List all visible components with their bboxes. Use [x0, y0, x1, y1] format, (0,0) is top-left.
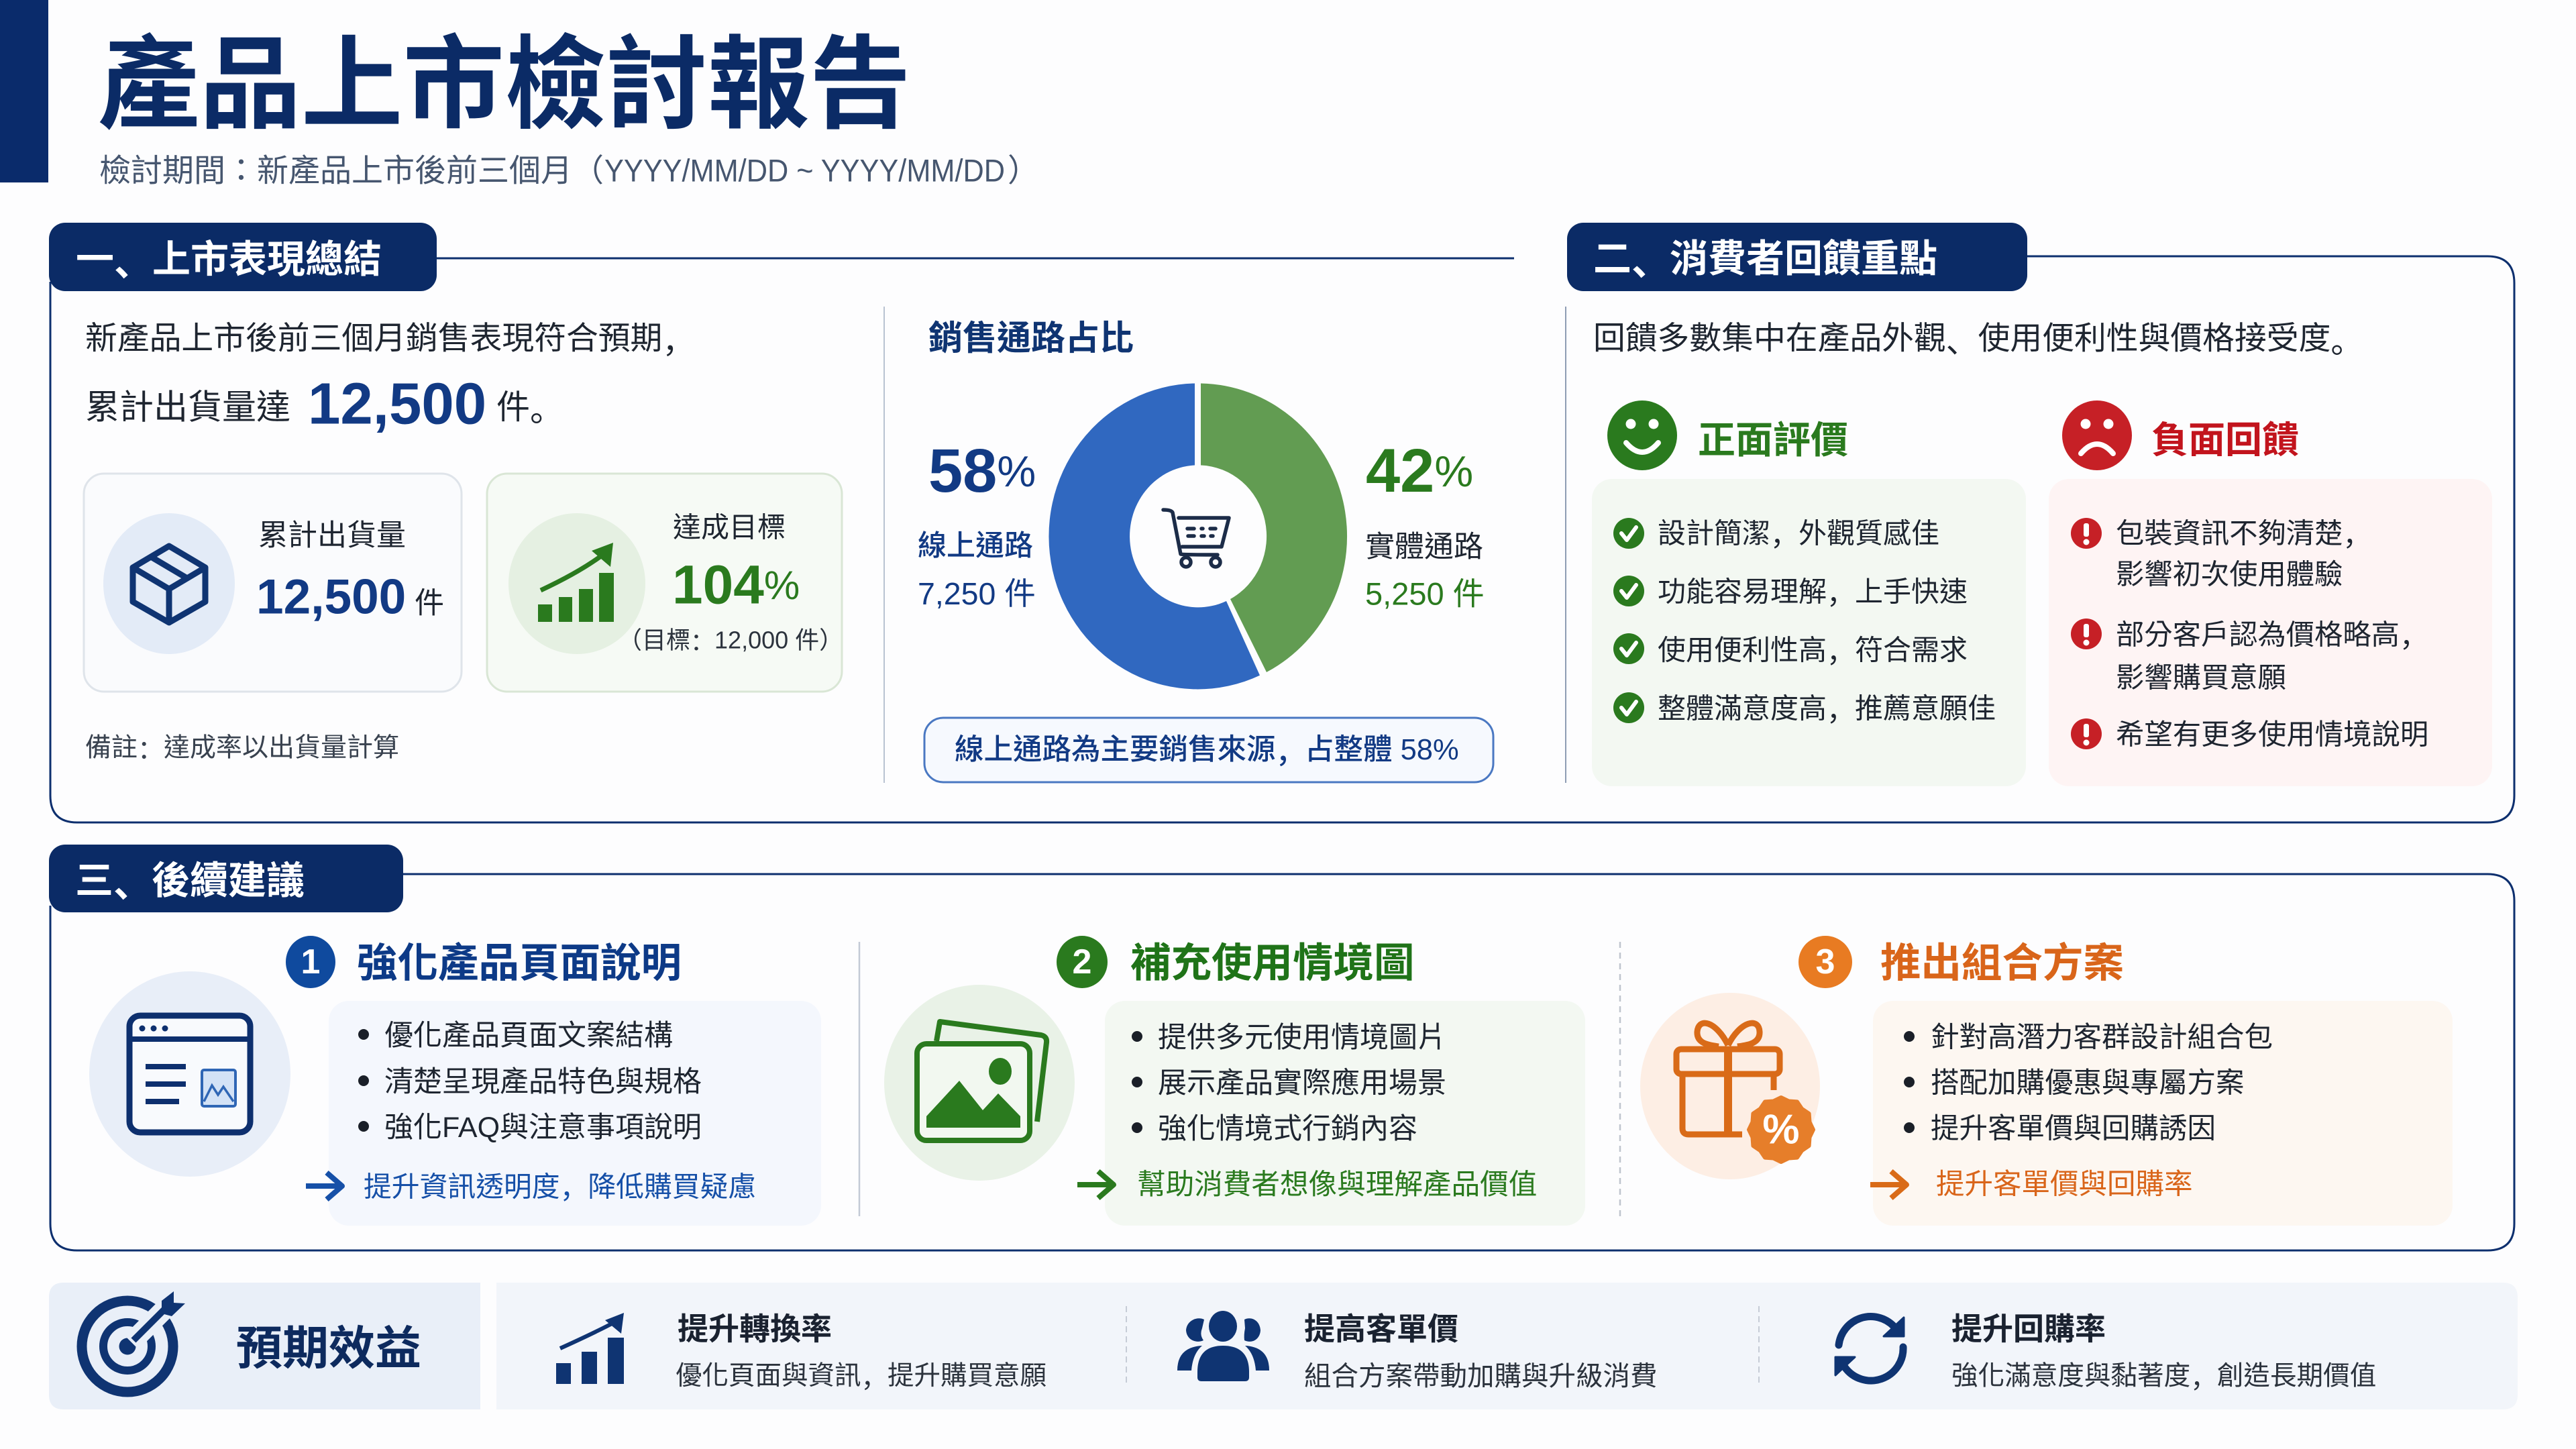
physical channel label [1365, 437, 1485, 612]
panel: consumer feedback highlights [1566, 223, 2514, 822]
stat card: target achievement [487, 474, 843, 692]
bullet list: 針對高潛力客群設計組合包 [1931, 1022, 2273, 1053]
outcome text: 提升資訊透明度，降低購買疑慮 [364, 1167, 756, 1207]
summary sentence [85, 315, 694, 436]
summary sentence: 件。 [496, 383, 564, 431]
benefit: conversion rate: 提升轉換率 [678, 1311, 832, 1346]
stat card: cumulative shipments [84, 474, 462, 692]
feedback summary: 回饋多數集中在產品外觀、使用便利性與價格接受度。 [1593, 315, 2363, 362]
column divider [1619, 942, 1621, 1216]
panel: expected benefits list [496, 1283, 2518, 1409]
icon: frowning face [2062, 400, 2132, 470]
summary sentence: 累計出貨量達 [85, 388, 290, 427]
panel outline [50, 258, 1570, 822]
recommendation 1: product page [89, 936, 821, 1226]
subtitle: review period: ） [1008, 153, 1039, 188]
stat label: 累計出貨量 [258, 519, 406, 551]
panel outline [50, 874, 2514, 1250]
positive item 4: 整體滿意度高，推薦意願佳 [1658, 688, 1996, 729]
subtitle: review period: YYYY/MM/DD ~ YYYY/MM/DD [604, 153, 1005, 188]
online channel label: 58% [928, 437, 1036, 505]
column divider [1565, 307, 1566, 783]
benefit: repurchase rate [1835, 1311, 2376, 1395]
benefit: repurchase rate: 提升回購率 [1951, 1311, 2106, 1346]
section heading tab: 二、消費者回饋重點 [1593, 231, 1937, 286]
icon: browser window [89, 971, 290, 1177]
section heading tab: 三、後續建議 [75, 853, 305, 908]
recommendation 2: usage scenarios [884, 936, 1585, 1226]
bullet list: 清楚呈現產品特色與規格 [384, 1066, 702, 1098]
header accent bar [0, 0, 48, 182]
summary sentence: 12,500 [308, 372, 486, 436]
negative item 1: 影響初次使用體驗 [2116, 558, 2343, 590]
divider [1758, 1306, 1760, 1386]
icon: photo stack [884, 985, 1075, 1181]
online channel label: 7,250 件 [918, 576, 1036, 611]
outcome text: 提升客單價與回購率 [1936, 1169, 2193, 1201]
physical channel label: 實體通路 [1365, 530, 1483, 564]
panel: follow-up recommendations [49, 845, 2514, 1250]
outcome text: 幫助消費者想像與理解產品價值 [1137, 1169, 1537, 1201]
negative heading: 負面回饋 [2151, 419, 2299, 461]
bullet list [358, 1020, 702, 1144]
bullet list [1904, 1022, 2273, 1144]
recommendation heading: 補充使用情境圖 [1130, 940, 1414, 985]
icon: refresh arrows [1835, 1317, 1904, 1381]
stat value: 12,500 [256, 570, 406, 624]
column divider [883, 307, 885, 783]
section heading tab [49, 223, 437, 291]
chart heading: 銷售通路占比 [928, 319, 1134, 357]
donut chart [1049, 384, 1347, 689]
number badge [1057, 936, 1108, 988]
arrow [1077, 1171, 1114, 1198]
recommendation heading: 推出組合方案 [1880, 940, 2124, 985]
number badge [1799, 936, 1852, 988]
negative list box [2049, 479, 2492, 786]
stat unit: 件 [415, 586, 444, 620]
section heading tab: 一、上市表現總結 [76, 232, 382, 287]
bullet list: 提升客單價與回購誘因 [1931, 1114, 2216, 1144]
subtitle: review period: 檢討期間：新產品上市後前三個月（ [99, 153, 604, 188]
divider [1126, 1306, 1127, 1386]
icon: box [103, 513, 235, 654]
bullet list: 強化情境式行銷內容 [1158, 1113, 1417, 1145]
title: 產品上市檢討報告 [98, 28, 911, 142]
benefit: repurchase rate: 強化滿意度與黏著度，創造長期價值 [1951, 1356, 2376, 1395]
positive item 1: 設計簡潔，外觀質感佳 [1658, 513, 1939, 554]
benefit: conversion rate: 優化頁面與資訊，提升購買意願 [676, 1356, 1046, 1395]
physical channel label: 5,250 件 [1365, 576, 1485, 612]
number badge [286, 936, 335, 988]
column divider [859, 942, 860, 1216]
icon: target with arrow [82, 1291, 185, 1392]
bullet list: 強化FAQ與注意事項說明 [384, 1112, 702, 1144]
arrow [306, 1173, 342, 1199]
number badge: 3 [1816, 943, 1835, 981]
benefit: average order value [1177, 1311, 1657, 1391]
benefit: conversion rate [556, 1311, 1046, 1395]
icon: smiling face [1607, 400, 1677, 470]
icon: rising bars [556, 1313, 624, 1384]
icon: growth chart [508, 513, 645, 654]
negative item 1: 包裝資訊不夠清楚， [2116, 513, 2371, 554]
online channel label: 線上通路 [918, 530, 1033, 562]
target note: （目標：12,000 件） [618, 623, 843, 657]
positive item 2: 功能容易理解，上手快速 [1658, 572, 1968, 612]
positive list box [1592, 479, 2026, 786]
icon: people [1177, 1311, 1269, 1381]
number badge: 2 [1073, 943, 1091, 981]
bullet box [1105, 1001, 1585, 1226]
number badge: 1 [301, 943, 320, 981]
physical channel label: 42% [1366, 437, 1473, 505]
label text: 預期效益 [236, 1323, 421, 1374]
recommendation 3: bundles [1640, 936, 2453, 1226]
bullet box [1873, 1001, 2453, 1226]
negative feedback column [2049, 400, 2492, 786]
online channel label [918, 437, 1036, 611]
bullet list [1132, 1022, 1446, 1145]
panel outline [1570, 256, 2514, 822]
negative item 3: 希望有更多使用情境說明 [2116, 719, 2428, 750]
bullet list: 搭配加購優惠與專屬方案 [1931, 1068, 2245, 1099]
summary sentence: 新產品上市後前三個月銷售表現符合預期， [85, 315, 694, 362]
stat label: 達成目標 [673, 511, 786, 543]
negative item 2 [2071, 614, 2428, 694]
recommendation heading: 強化產品頁面說明 [357, 940, 682, 985]
section heading tab [49, 845, 403, 912]
icon: gift with discount badge: % [1762, 1107, 1800, 1152]
subtitle: review period [99, 153, 1039, 188]
callout: online is main channel [924, 718, 1493, 782]
positive item 3: 使用便利性高，符合需求 [1658, 629, 1968, 671]
icon: gift with discount badge [1640, 993, 1820, 1179]
negative item 1 [2071, 513, 2371, 590]
panel: expected benefits label [49, 1283, 480, 1409]
bullet list: 優化產品頁面文案結構 [384, 1020, 673, 1052]
bullet list: 展示產品實際應用場景 [1158, 1067, 1446, 1099]
benefit: average order value: 提高客單價 [1304, 1311, 1458, 1346]
arrow [1870, 1171, 1907, 1198]
footnote: 備註：達成率以出貨量計算 [85, 729, 399, 767]
positive heading: 正面評價 [1698, 419, 1848, 462]
positive feedback column [1592, 400, 2026, 786]
stat value: 104% [672, 554, 800, 616]
benefit: average order value: 組合方案帶動加購與升級消費 [1304, 1360, 1657, 1391]
negative item 2: 部分客戶認為價格略高， [2116, 614, 2428, 655]
negative item 2: 影響購買意願 [2116, 661, 2286, 694]
bullet box [329, 1001, 821, 1226]
panel: sales performance summary [49, 223, 1570, 822]
icon: shopping cart [1163, 510, 1229, 567]
bullet list: 提供多元使用情境圖片 [1158, 1022, 1446, 1054]
section heading tab [1567, 223, 2027, 291]
callout: online is main channel: 線上通路為主要銷售來源，占整體 58% [955, 729, 1459, 771]
